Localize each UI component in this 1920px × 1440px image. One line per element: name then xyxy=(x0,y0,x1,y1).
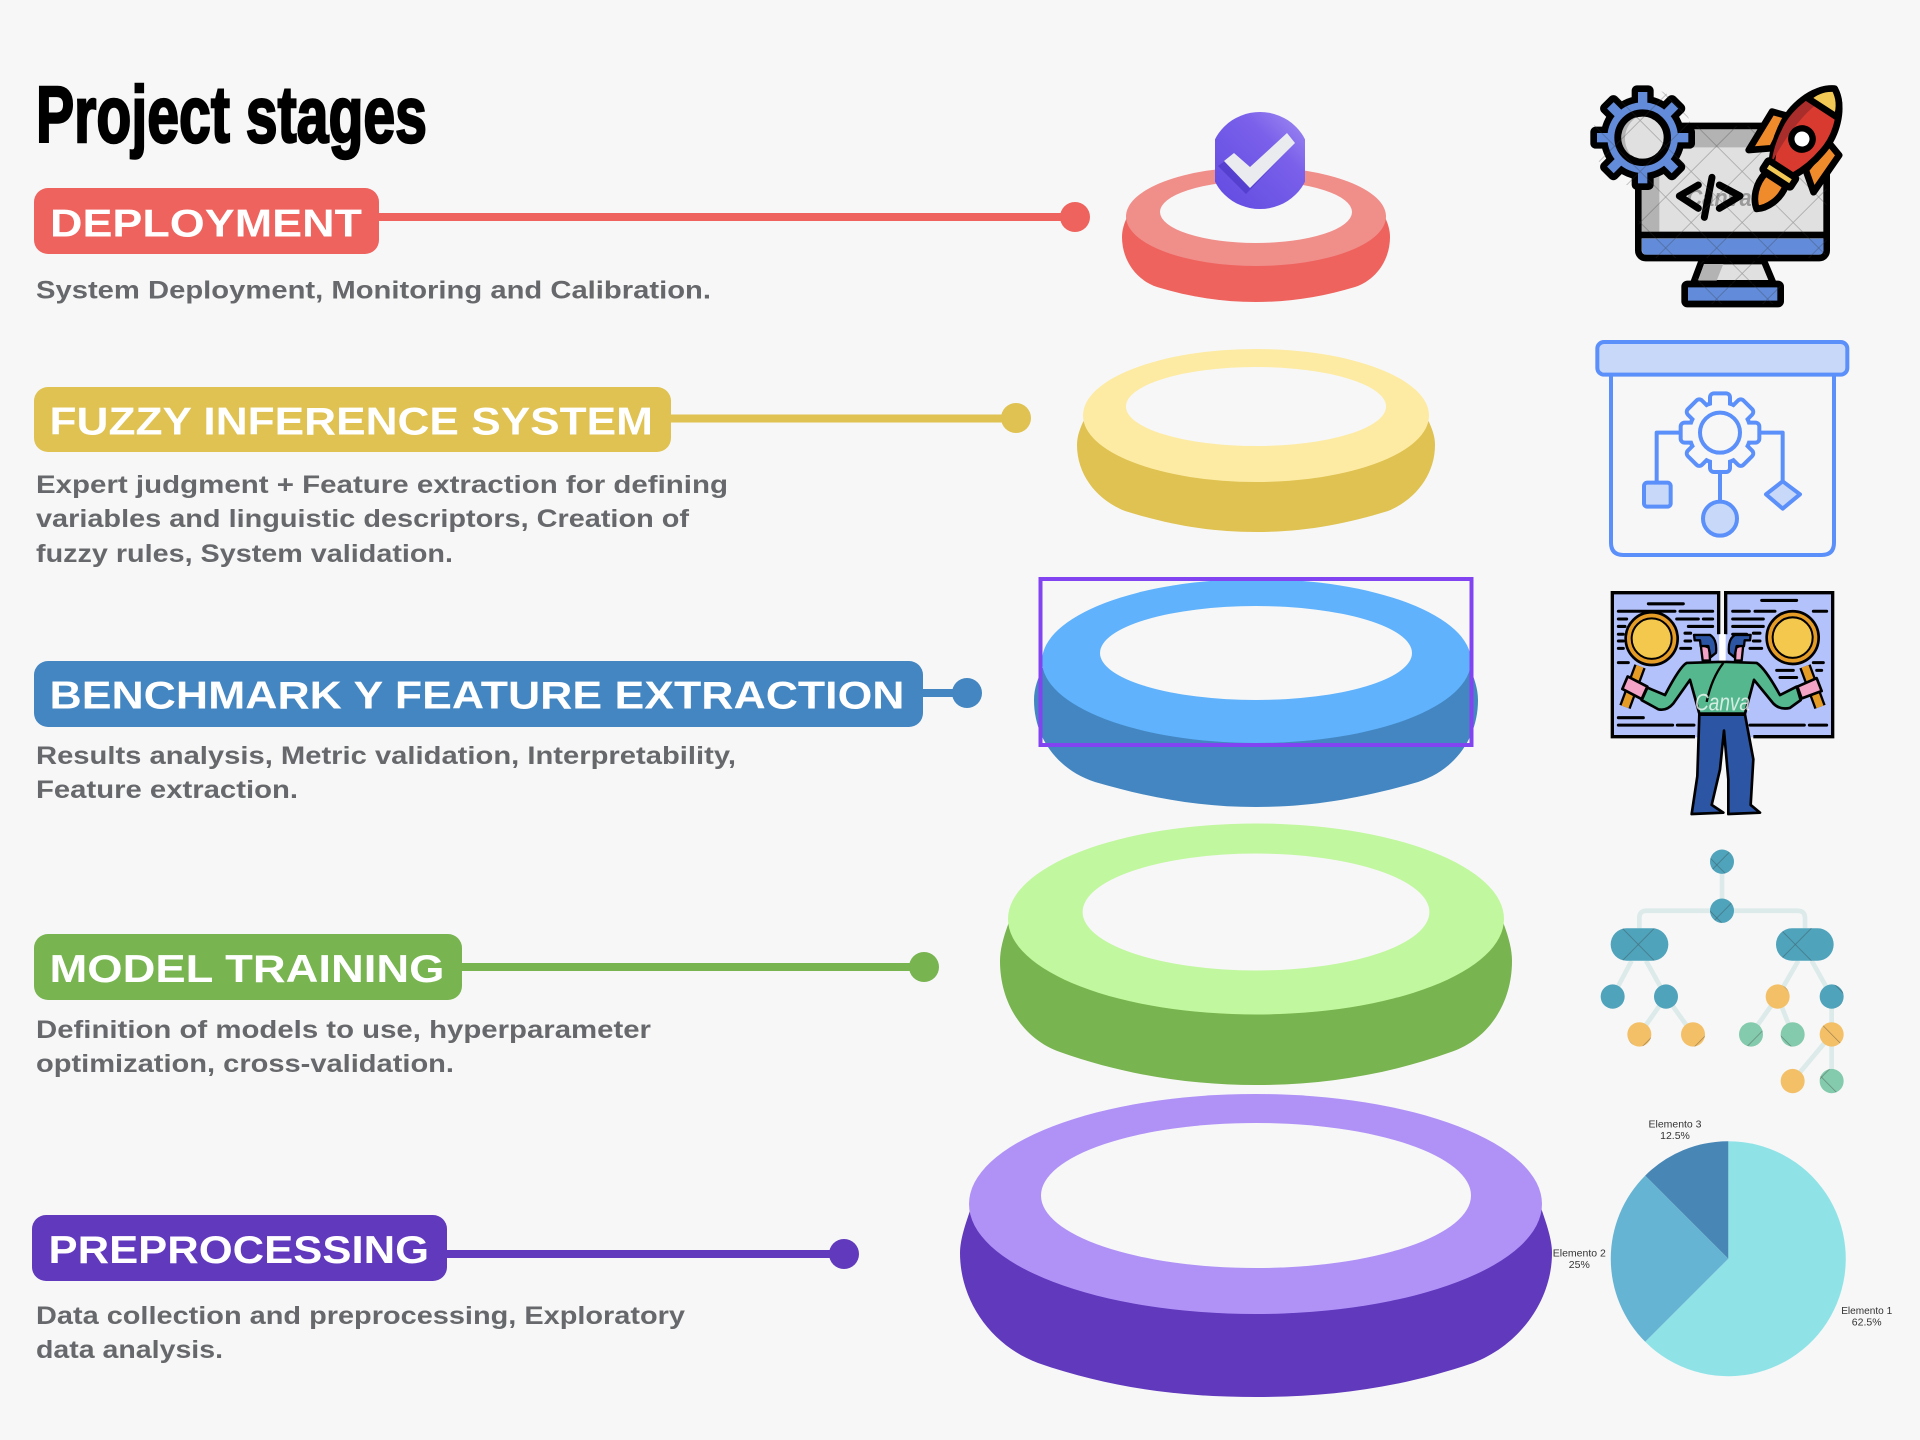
watermark lattice xyxy=(1622,852,1844,1092)
label text: deployment: DEPLOYMENT xyxy=(50,202,362,246)
magnifier left xyxy=(1622,612,1678,707)
pie label: Elemento 3: Elemento 3 xyxy=(1648,1119,1702,1131)
tree nodes: green xyxy=(1739,1022,1844,1093)
description: fuzzy: Expert judgment + Feature extraction for defining xyxy=(36,471,728,499)
description: fuzzy: fuzzy rules, System validation. xyxy=(36,540,453,568)
stage: benchmark xyxy=(34,661,982,804)
tree edges xyxy=(1613,862,1832,1081)
description: deployment: System Deployment, Monitoring and Calibration. xyxy=(36,276,711,304)
document text lines xyxy=(1618,600,1827,725)
stage: preprocessing xyxy=(32,1215,859,1364)
tree nodes: teal xyxy=(1601,850,1844,1009)
pie label: Elemento 3: 12.5% xyxy=(1660,1130,1690,1142)
pie chart xyxy=(1553,1119,1892,1376)
magnifier right xyxy=(1767,611,1822,707)
slice: Elemento 1 xyxy=(1645,1141,1846,1376)
stage: fuzzy inference system xyxy=(34,387,1031,568)
description: benchmark: Results analysis, Metric validation, Interpretability, xyxy=(36,742,736,770)
monitor body xyxy=(1638,126,1827,258)
box body xyxy=(1611,373,1834,555)
connector: fuzzy xyxy=(665,403,1031,433)
connector: benchmark xyxy=(918,678,982,708)
title: Project stages xyxy=(36,70,427,159)
stage: model training xyxy=(34,934,939,1078)
gear xyxy=(1590,85,1695,190)
description: preprocessing xyxy=(36,1302,685,1364)
pie label: Elemento 1 xyxy=(1841,1305,1892,1328)
connector lines xyxy=(1657,433,1783,502)
description: preprocessing: data analysis. xyxy=(36,1336,223,1364)
stage: deployment xyxy=(34,188,1090,304)
flow nodes xyxy=(1644,481,1800,536)
label pill: fuzzy xyxy=(34,387,671,452)
description: model training: optimization, cross-validation. xyxy=(36,1050,454,1078)
icon: decision tree xyxy=(1593,847,1853,1097)
document panels xyxy=(1612,592,1719,737)
pie label: Elemento 2: 25% xyxy=(1569,1259,1590,1271)
ring: fuzzy inference system xyxy=(1077,349,1435,532)
label text: model training: MODEL TRAINING xyxy=(50,948,444,991)
box lid xyxy=(1597,342,1847,375)
ring: benchmark xyxy=(1034,579,1478,807)
description: fuzzy: variables and linguistic descriptors, Creation of xyxy=(36,505,690,533)
label pill: model training xyxy=(34,934,462,1000)
connector: preprocessing xyxy=(440,1239,859,1269)
rocket xyxy=(1723,67,1868,231)
watermark text: Canva xyxy=(1687,185,1752,212)
watermark text: Canva xyxy=(1695,689,1750,716)
watermark lattice xyxy=(1590,83,1830,307)
slice: Elemento 3 xyxy=(1645,1141,1728,1259)
label pill: deployment xyxy=(34,188,379,254)
pie label: Elemento 3 xyxy=(1648,1119,1702,1142)
pie label: Elemento 2: Elemento 2 xyxy=(1553,1248,1606,1260)
slice: Elemento 2 xyxy=(1611,1176,1728,1342)
description: model training xyxy=(36,1016,651,1078)
description: fuzzy xyxy=(36,471,728,568)
connector: model training xyxy=(456,952,939,982)
ring: preprocessing xyxy=(960,1094,1552,1397)
monitor stand xyxy=(1693,261,1773,283)
icon: analysts with magnifying glasses xyxy=(1612,592,1833,814)
figures: torso and arms xyxy=(1642,662,1801,714)
label text: fuzzy: FUZZY INFERENCE SYSTEM xyxy=(50,400,653,444)
pie label: Elemento 2 xyxy=(1553,1248,1606,1271)
connector: deployment xyxy=(375,202,1090,232)
label pill: benchmark xyxy=(34,661,923,727)
description: benchmark xyxy=(36,742,736,804)
ring: model training xyxy=(1000,824,1512,1085)
description: model training: Definition of models to use, hyperparameter xyxy=(36,1016,651,1044)
pie label: Elemento 1: 62.5% xyxy=(1852,1316,1882,1328)
selection frame xyxy=(1040,579,1472,745)
description: preprocessing: Data collection and preprocessing, Exploratory xyxy=(36,1302,685,1330)
icon: flowchart box xyxy=(1597,342,1847,555)
icon: monitor, gear and rocket xyxy=(1590,85,1843,308)
figures: legs xyxy=(1692,715,1760,814)
code symbol xyxy=(1679,177,1740,217)
pie label: Elemento 1: Elemento 1 xyxy=(1841,1305,1892,1317)
label text: benchmark: BENCHMARK Y FEATURE EXTRACTION xyxy=(50,674,904,718)
label text: preprocessing: PREPROCESSING xyxy=(48,1229,429,1272)
description: benchmark: Feature extraction. xyxy=(36,776,298,804)
icon: check badge xyxy=(1210,112,1310,209)
ring: deployment xyxy=(1122,167,1390,302)
label pill: preprocessing xyxy=(32,1215,447,1281)
figures: heads xyxy=(1694,635,1751,661)
gear symbol xyxy=(1683,395,1757,470)
tree nodes: orange xyxy=(1627,984,1844,1093)
